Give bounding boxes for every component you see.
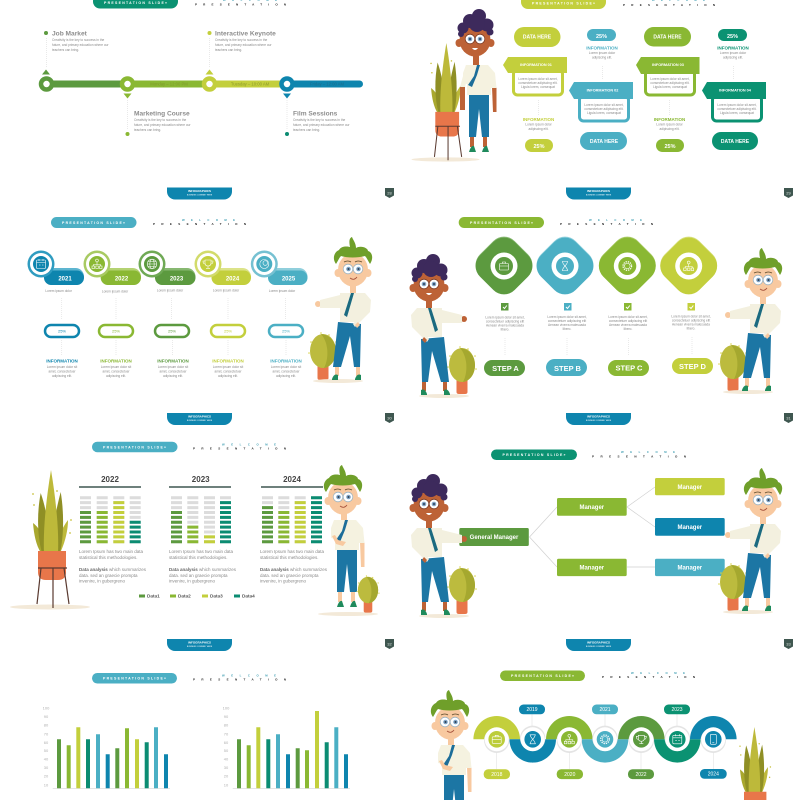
- percent pills: [45, 325, 303, 337]
- information labels: [523, 45, 749, 131]
- heading pill: [92, 442, 178, 452]
- timeline bar: Monday – 12:00 PM: [150, 82, 188, 86]
- info block 02: INFORMATION 02: [587, 88, 618, 92]
- step pills: STEP A: [492, 364, 519, 373]
- column: 2022: Data analysis: [79, 567, 108, 572]
- connector lines: [530, 487, 655, 567]
- info block 01: Ligula lorem, consequat: [521, 85, 555, 89]
- year labels: [484, 704, 727, 779]
- year 2021: 2021: [58, 276, 72, 282]
- welcome presentation heading: [623, 0, 715, 7]
- info block 01: INFORMATION 01: [520, 63, 552, 67]
- page number: [784, 188, 793, 198]
- milestone captions: Lorem ipsum dolor: [102, 290, 129, 294]
- footer tab: [566, 413, 631, 425]
- bar chart right: 80: [224, 723, 229, 728]
- year 2022: 2022: [115, 276, 129, 282]
- bar chart left: 50: [44, 748, 49, 753]
- callout: marketing course: [126, 110, 191, 136]
- callout: job market: Job Market: [52, 30, 88, 38]
- percent badges: [525, 29, 747, 152]
- information labels: Lorem ipsum dolor sit: [101, 365, 131, 369]
- legend: Data1: [147, 594, 160, 599]
- panel: yearly milestones slide: [28, 217, 394, 425]
- info block 03: Ligula lorem, consequat: [653, 85, 687, 89]
- box: manager bottom: Manager: [579, 566, 605, 572]
- percent pills: 25%: [112, 328, 120, 334]
- data pill lime: [514, 27, 560, 47]
- step A diamond: [469, 230, 539, 301]
- year 2023: [138, 250, 196, 285]
- panel: information steps slide: [412, 0, 793, 200]
- illustration: boy pointing: [410, 474, 469, 618]
- bar chart left: 90: [44, 714, 49, 719]
- welcome presentation heading: PRESENTATION: [602, 675, 695, 679]
- milestone captions: Lorem ipsum dolor: [213, 288, 240, 292]
- welcome presentation heading: PRESENTATION: [193, 678, 286, 682]
- welcome presentation heading: WELCOME: [222, 442, 276, 446]
- callout: job market: Creativity is the key to success in the: [52, 38, 104, 42]
- welcome presentation heading: [592, 450, 686, 458]
- step descriptions: consectetuer adipiscing elit: [672, 318, 710, 322]
- callout: marketing course: teachers can bring.: [134, 128, 161, 132]
- column: 2023: Lorem Ipsum has two main data: [169, 549, 234, 554]
- column: 2023: 2023: [192, 475, 210, 484]
- information labels: INFORMATION: [654, 117, 685, 122]
- step C diamond: [593, 230, 662, 301]
- column: 2023: [169, 475, 237, 584]
- heading pill: [459, 217, 544, 228]
- heading pill: PRESENTATION SLIDE»: [104, 1, 167, 5]
- year labels: 2023: [671, 707, 683, 713]
- page number: [784, 413, 793, 423]
- column: 2024: data. sed an graecie prompta: [260, 573, 319, 578]
- year 2022: [84, 250, 141, 285]
- illustration: green-haired man pointing: [723, 468, 782, 614]
- year labels: 2020: [564, 772, 576, 778]
- year 2021: [28, 250, 84, 285]
- heading pill: PRESENTATION SLIDE»: [62, 221, 125, 225]
- information labels: Lorem ipsum dolor: [656, 122, 684, 126]
- step pills: [484, 358, 713, 376]
- illustration: green-haired man standing: [431, 690, 472, 800]
- percent badges: 25%: [533, 144, 545, 150]
- column: 2022: [79, 475, 147, 584]
- information labels: [46, 359, 302, 378]
- wave ribbon: [473, 716, 737, 763]
- heading pill: PRESENTATION SLIDE»: [532, 2, 595, 6]
- information labels: Lorem ipsum dolor: [720, 51, 747, 55]
- milestone captions: Lorem ipsum dolor: [45, 289, 73, 293]
- bar chart left: 10: [44, 782, 49, 788]
- footer tab: [167, 413, 232, 425]
- bar chart right: 20: [224, 774, 229, 779]
- info block 04: consectetuer adipiscing elit.: [717, 107, 757, 111]
- year 2024: 2024: [226, 276, 240, 282]
- bar chart right: 50: [224, 748, 229, 753]
- illustration: cactus left: [447, 566, 477, 614]
- percent pills: 25%: [58, 328, 66, 334]
- info block 01: consectetuer adipiscing elit.: [518, 81, 558, 85]
- information labels: INFORMATION: [212, 359, 244, 364]
- information labels: adipiscing elit.: [723, 56, 743, 60]
- column: 2023: invenire, in gubergreno: [169, 578, 216, 584]
- welcome presentation heading: WELCOME: [182, 218, 235, 222]
- info block 01: Lorem ipsum dolor sit amet,: [518, 77, 558, 81]
- legend: [139, 594, 255, 599]
- callout: job market: future, and primary education where our: [52, 43, 109, 47]
- percent pills: 25%: [168, 328, 176, 334]
- illustration: cactus left: [447, 346, 477, 394]
- information labels: Lorem ipsum dolor: [525, 122, 553, 126]
- information labels: INFORMATION: [586, 45, 618, 50]
- bar chart right: [223, 706, 350, 788]
- info block 02: Lorem ipsum dolor sit amet,: [584, 103, 624, 107]
- information labels: Lorem ipsum dolor sit: [213, 365, 243, 369]
- information labels: INFORMATION: [100, 359, 132, 364]
- info block 04: [702, 82, 766, 121]
- welcome presentation heading: [153, 218, 246, 226]
- info block 03: INFORMATION 03: [652, 63, 684, 67]
- info block 01: [503, 57, 567, 95]
- panel: bar charts slide: [43, 673, 350, 788]
- column: 2024: [260, 475, 328, 584]
- step descriptions: Aenean viverra malesuada: [548, 323, 586, 327]
- callout: job market: teachers can bring.: [52, 48, 79, 52]
- year 2025: 2025: [282, 276, 296, 282]
- step descriptions: Lorem ipsum dolor sit amet,: [608, 315, 648, 319]
- step descriptions: Aenean viverra malesuada: [609, 323, 647, 327]
- heading pill: PRESENTATION SLIDE»: [103, 677, 166, 681]
- step pills: STEP C: [616, 364, 643, 372]
- callout: marketing course: Creativity is the key to success in the: [134, 118, 186, 122]
- information labels: Lorem ipsum dolor sit: [158, 365, 188, 369]
- bar chart left: 40: [44, 757, 49, 762]
- heading pill: [521, 0, 606, 9]
- callout: interactive keynote: Creativity is the key to success in the: [215, 38, 267, 42]
- information labels: INFORMATION: [46, 359, 78, 364]
- bar chart right: 40: [224, 757, 229, 762]
- information labels: INFORMATION: [270, 359, 302, 364]
- illustration: small cactus: [356, 575, 380, 613]
- callout: interactive keynote: [208, 30, 276, 52]
- legend: Data2: [178, 594, 191, 599]
- year 2024: [194, 250, 251, 285]
- year labels: 2021: [599, 707, 611, 713]
- illustration: plant on stand: [10, 470, 90, 610]
- bar chart left: 30: [44, 765, 49, 770]
- column: 2023: which summarizes: [198, 567, 237, 572]
- heading pill: [51, 217, 136, 228]
- panel: job timeline slide: [41, 0, 394, 200]
- information labels: amet, consectetuer: [48, 370, 76, 374]
- heading pill: [500, 670, 585, 681]
- box: manager cyan: [655, 559, 725, 576]
- info block 03: [636, 57, 700, 95]
- bar chart left: 60: [44, 740, 49, 745]
- welcome presentation heading: WELCOME: [589, 218, 642, 222]
- year labels: 2018: [491, 772, 503, 778]
- year labels: 2024: [708, 772, 719, 778]
- column: 2022: data. sed an graecie prompta: [79, 573, 138, 578]
- bar chart 2023: [176, 496, 226, 543]
- column: 2024: Data analysis: [260, 567, 289, 572]
- panel: org chart slide: [410, 450, 793, 651]
- callout: interactive keynote: Interactive Keynote: [215, 30, 276, 38]
- information labels: adipiscing elit.: [659, 127, 680, 131]
- info block 03: consectetuer adipiscing elit.: [650, 81, 690, 85]
- bar chart left: 100: [43, 706, 50, 710]
- welcome presentation heading: PRESENTATION: [153, 222, 246, 226]
- information labels: adipiscing elit.: [163, 374, 183, 378]
- page number: [385, 639, 394, 649]
- column: 2024: which summarizes: [289, 567, 328, 572]
- illustration: cactus: [308, 332, 338, 380]
- bar chart right: 90: [224, 714, 229, 719]
- year 2025: [251, 250, 308, 285]
- milestone captions: Lorem ipsum dolor: [157, 288, 184, 292]
- panel: wave timeline slide: [431, 670, 786, 800]
- box: manager top: Manager: [579, 505, 605, 511]
- information labels: adipiscing elit.: [106, 374, 126, 378]
- heading pill: [93, 0, 178, 8]
- info block 04: Lorem ipsum dolor sit amet,: [717, 103, 757, 107]
- box: manager lime: Manager: [677, 485, 703, 491]
- step descriptions: libero.: [501, 328, 509, 332]
- welcome presentation heading: [560, 218, 653, 226]
- illustration: green-haired man pointing: [313, 237, 372, 383]
- illustration: boy pointing: [410, 254, 469, 398]
- footer tab: [566, 639, 631, 651]
- heading pill: PRESENTATION SLIDE»: [511, 674, 574, 678]
- bar chart 2022: [86, 496, 135, 543]
- percent badges: 25%: [596, 34, 607, 40]
- percent pills: 25%: [282, 328, 290, 334]
- information labels: adipiscing elit.: [592, 56, 612, 60]
- column: 2023: statistical this methodologies.: [169, 555, 228, 560]
- information labels: INFORMATION: [717, 45, 749, 50]
- box: manager bottom: [557, 559, 627, 576]
- data pill green: DATA HERE: [653, 35, 682, 41]
- bar chart right: 100: [223, 706, 230, 710]
- heading pill: [491, 450, 577, 460]
- wave node icons: [484, 726, 726, 753]
- column: 2024: invenire, in gubergreno: [260, 578, 307, 584]
- box: manager lime: [655, 478, 725, 495]
- column: 2024: 2024: [283, 475, 301, 484]
- milestone captions: [45, 288, 296, 356]
- illustration: cactus right: [718, 343, 748, 391]
- page number: 30: [387, 416, 392, 420]
- page number: [385, 413, 394, 423]
- information labels: INFORMATION: [523, 117, 554, 122]
- callout: film sessions: Film Sessions: [293, 110, 338, 118]
- heading pill: PRESENTATION SLIDE»: [502, 453, 566, 457]
- info block 04: INFORMATION 04: [719, 88, 752, 92]
- column: 2022: 2022: [101, 475, 119, 484]
- welcome presentation heading: [195, 0, 286, 7]
- step descriptions: consectetuer adipiscing elit: [548, 319, 586, 323]
- welcome presentation heading: [193, 674, 286, 682]
- page number: [784, 639, 793, 649]
- welcome presentation heading: PRESENTATION: [623, 3, 715, 7]
- footer tab: [566, 188, 631, 200]
- milestone captions: Lorem ipsum dolor: [269, 289, 296, 293]
- callout: job market: [44, 30, 109, 52]
- box: manager top: [557, 498, 627, 516]
- info block 03: Lorem ipsum dolor sit amet,: [650, 77, 690, 81]
- info block 02: Ligula lorem, consequat: [587, 111, 621, 115]
- illustration: boy standing: [456, 9, 496, 152]
- welcome presentation heading: [602, 671, 695, 679]
- percent badges: 25%: [664, 144, 676, 150]
- page number: 31: [786, 416, 791, 420]
- step descriptions: Aenean viverra malesuada: [672, 322, 710, 326]
- information labels: adipiscing elit.: [52, 374, 72, 378]
- column: 2022: statistical this methodologies.: [79, 555, 138, 560]
- column: 2023: data. sed an graecie prompta: [169, 573, 228, 578]
- checkbox icons: [501, 303, 695, 310]
- info block 02: [569, 82, 633, 121]
- percent badges: 25%: [727, 34, 738, 40]
- heading pill: PRESENTATION SLIDE»: [103, 445, 166, 449]
- timeline bar: Friday – 12:00 AM: [310, 82, 345, 86]
- percent pills: 25%: [224, 328, 232, 334]
- welcome presentation heading: PRESENTATION: [195, 3, 286, 7]
- information labels: Lorem ipsum dolor sit: [271, 365, 301, 369]
- data pill teal: DATA HERE: [721, 139, 750, 145]
- bar chart right: 30: [224, 765, 229, 770]
- box: general manager: General Manager: [470, 535, 519, 541]
- column: 2022: which summarizes: [108, 567, 147, 572]
- illustration: green-haired man pointing: [723, 248, 782, 394]
- data pill cyan: DATA HERE: [590, 139, 619, 145]
- step descriptions: libero.: [687, 326, 695, 330]
- information labels: amet, consectetuer: [102, 370, 130, 374]
- step D diamond: [654, 230, 723, 301]
- information labels: Lorem ipsum dolor: [589, 51, 616, 55]
- data pill green: [644, 27, 691, 46]
- year labels: 2022: [635, 772, 647, 778]
- bar chart left: 80: [44, 723, 49, 728]
- callout: marketing course: future, and primary education where our: [134, 123, 191, 127]
- callout: film sessions: Creativity is the key to success in the: [293, 118, 345, 122]
- legend: Data4: [242, 594, 255, 599]
- bar chart right: 10: [224, 782, 229, 788]
- box: manager cyan: Manager: [677, 566, 703, 572]
- column: 2022: Lorem Ipsum has two main data: [79, 549, 144, 554]
- page number: 32: [387, 642, 392, 646]
- footer tab: [167, 188, 232, 200]
- information labels: Lorem ipsum dolor sit: [47, 365, 77, 369]
- page number: 28: [387, 190, 392, 196]
- bar chart 2024: [268, 495, 316, 543]
- information labels: adipiscing elit.: [218, 374, 238, 378]
- page number: [385, 188, 394, 198]
- welcome presentation heading: WELCOME: [222, 674, 276, 678]
- step descriptions: [485, 314, 711, 356]
- column: 2023: Data analysis: [169, 567, 198, 572]
- information labels: adipiscing elit.: [528, 127, 549, 131]
- timeline bar: [41, 38, 360, 130]
- column: 2022: invenire, in gubergreno: [79, 578, 126, 584]
- callout: interactive keynote: future, and primary education where our: [215, 43, 272, 47]
- data pill cyan: [580, 132, 627, 150]
- welcome presentation heading: PRESENTATION: [193, 446, 286, 450]
- step B diamond: [530, 230, 600, 301]
- callout: interactive keynote: teachers can bring.: [215, 48, 242, 52]
- column: 2024: Lorem Ipsum has two main data: [260, 549, 325, 554]
- page number: 33: [786, 642, 791, 646]
- year labels: 2019: [526, 707, 538, 713]
- step pills: STEP B: [554, 364, 582, 373]
- illustration: plant on stand: [412, 43, 480, 162]
- timeline bar: Tuesday – 10:00 AM: [231, 82, 270, 86]
- illustration: plant: [722, 727, 786, 800]
- information labels: amet, consectetuer: [272, 370, 300, 374]
- information labels: amet, consectetuer: [159, 370, 187, 374]
- callout: film sessions: future, and primary education where our: [293, 123, 350, 127]
- welcome presentation heading: PRESENTATION: [560, 222, 653, 226]
- info block 02: consectetuer adipiscing elit.: [584, 107, 624, 111]
- data pill lime: DATA HERE: [523, 35, 552, 41]
- callout: film sessions: [285, 110, 350, 136]
- information labels: INFORMATION: [157, 359, 189, 364]
- box: general manager: [459, 528, 529, 546]
- step pills: STEP D: [679, 362, 707, 371]
- illustration: green-haired man standing: [318, 465, 378, 616]
- bar chart right: 60: [224, 740, 229, 745]
- welcome presentation heading: PRESENTATION: [592, 454, 686, 458]
- information labels: adipiscing elit.: [276, 374, 296, 378]
- step descriptions: Lorem ipsum dolor sit amet,: [547, 315, 587, 319]
- bar chart right: 70: [224, 732, 229, 736]
- bar chart left: 70: [44, 732, 49, 736]
- legend: Data3: [210, 594, 223, 599]
- welcome presentation heading: [193, 442, 286, 450]
- footer tab: [167, 639, 232, 651]
- page number: 29: [786, 190, 791, 196]
- illustration: cactus right: [718, 563, 748, 611]
- box: manager blue: [655, 518, 725, 536]
- info block 04: Ligula lorem, consequat: [720, 111, 754, 115]
- data pill teal: [712, 132, 758, 150]
- callout: marketing course: Marketing Course: [134, 110, 190, 118]
- step descriptions: libero.: [563, 327, 571, 331]
- callout: film sessions: teachers can bring.: [293, 128, 320, 132]
- heading pill: [92, 673, 177, 684]
- step descriptions: Lorem ipsum dolor sit amet,: [671, 314, 711, 318]
- step descriptions: consectetuer adipiscing elit: [486, 320, 524, 324]
- welcome presentation heading: WELCOME: [621, 450, 675, 454]
- year 2023: 2023: [170, 276, 184, 282]
- bar chart left: [43, 706, 170, 788]
- step descriptions: consectetuer adipiscing elit: [609, 319, 647, 323]
- step descriptions: Lorem ipsum dolor sit amet,: [485, 316, 525, 320]
- box: manager blue: Manager: [677, 525, 703, 531]
- step descriptions: Aenean viverra malesuada: [486, 324, 524, 328]
- step descriptions: libero.: [624, 327, 632, 331]
- heading pill: PRESENTATION SLIDE»: [470, 221, 533, 225]
- column: 2024: statistical this methodologies.: [260, 555, 319, 560]
- panel: step diamonds slide: [410, 217, 793, 425]
- bar chart left: 20: [44, 774, 49, 779]
- welcome presentation heading: WELCOME: [631, 671, 685, 675]
- panel: data columns slide: [10, 442, 394, 651]
- information labels: amet, consectetuer: [214, 370, 242, 374]
